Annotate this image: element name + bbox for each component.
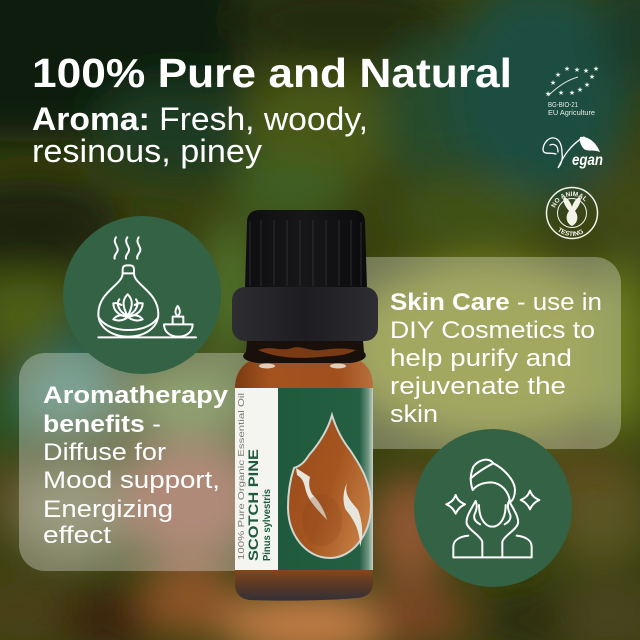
badge: EU organic: ★ — [593, 65, 599, 73]
skin care text: rejuvenate the — [390, 373, 566, 400]
skin care text — [390, 289, 602, 428]
aromatherapy text: benefits - — [43, 411, 161, 438]
label text latin name: Pinus sylvestris — [262, 489, 273, 561]
badge: EU organic: ★ — [569, 89, 575, 97]
oil drop emblem — [288, 415, 371, 558]
badge: EU organic: ★ — [545, 90, 551, 98]
circle: skincare icon background — [414, 429, 572, 587]
badge: no animal testing: NO ANIMAL — [551, 191, 586, 208]
badge: EU organic: ★ — [558, 89, 564, 97]
aroma text — [32, 101, 368, 169]
circle: diffuser icon background — [63, 216, 221, 374]
badge: EU organic: ★ — [583, 67, 589, 75]
label text small: 100% Pure Organic Essential Oil — [236, 393, 246, 560]
badge: no animal testing — [546, 186, 598, 240]
skin care text: Skin Care - use in — [390, 289, 602, 316]
bottle neck — [243, 340, 366, 363]
essential oil bottle — [232, 210, 378, 601]
bottle glass — [235, 360, 373, 601]
icon: aroma diffuser with lotus and candle — [98, 237, 196, 337]
badge: EU organic: ★ — [574, 66, 580, 74]
aromatherapy text: effect — [43, 522, 111, 549]
badge: no animal testing: TESTING — [558, 227, 584, 236]
skin care text: help purify and — [390, 345, 572, 372]
aromatherapy text: Aromatherapy — [43, 382, 229, 409]
aromatherapy text: Diffuse for — [43, 439, 166, 466]
aromatherapy text — [43, 382, 229, 549]
badge: EU organic: ★ — [577, 86, 583, 94]
title: 100% Pure and Natural — [32, 50, 512, 96]
aroma text: Aroma: Fresh, woody, — [32, 101, 368, 137]
label white strip — [235, 388, 278, 570]
skin care text: DIY Cosmetics to — [390, 317, 595, 344]
skin care text: skin — [390, 401, 438, 428]
panel: skin care background — [310, 257, 621, 449]
label green panel — [278, 388, 373, 570]
badge: vegan: egan — [572, 152, 603, 169]
aromatherapy text: Energizing — [43, 496, 173, 523]
bottle base — [235, 568, 373, 601]
badge: EU organic: EU Agriculture — [548, 110, 595, 117]
panel: aromatherapy background — [19, 353, 290, 571]
icon: woman with towel wrap and sparkles — [446, 460, 539, 557]
badge: EU organic: ★ — [564, 65, 570, 73]
badge: EU organic: ★ — [555, 71, 561, 79]
badge: EU organic: ★ — [584, 81, 590, 89]
cap ribbed — [245, 210, 367, 288]
aromatherapy text: Mood support, — [43, 467, 220, 494]
badge: EU organic — [545, 65, 599, 117]
badge: EU organic: BG-BIO-21 — [548, 102, 578, 109]
cap collar — [232, 287, 378, 341]
badge: EU organic: ★ — [550, 79, 556, 87]
label text product name: SCOTCH PINE — [245, 449, 261, 561]
badge: vegan — [543, 137, 603, 169]
badge: EU organic: ★ — [589, 73, 595, 81]
aroma text: resinous, piney — [32, 133, 262, 169]
